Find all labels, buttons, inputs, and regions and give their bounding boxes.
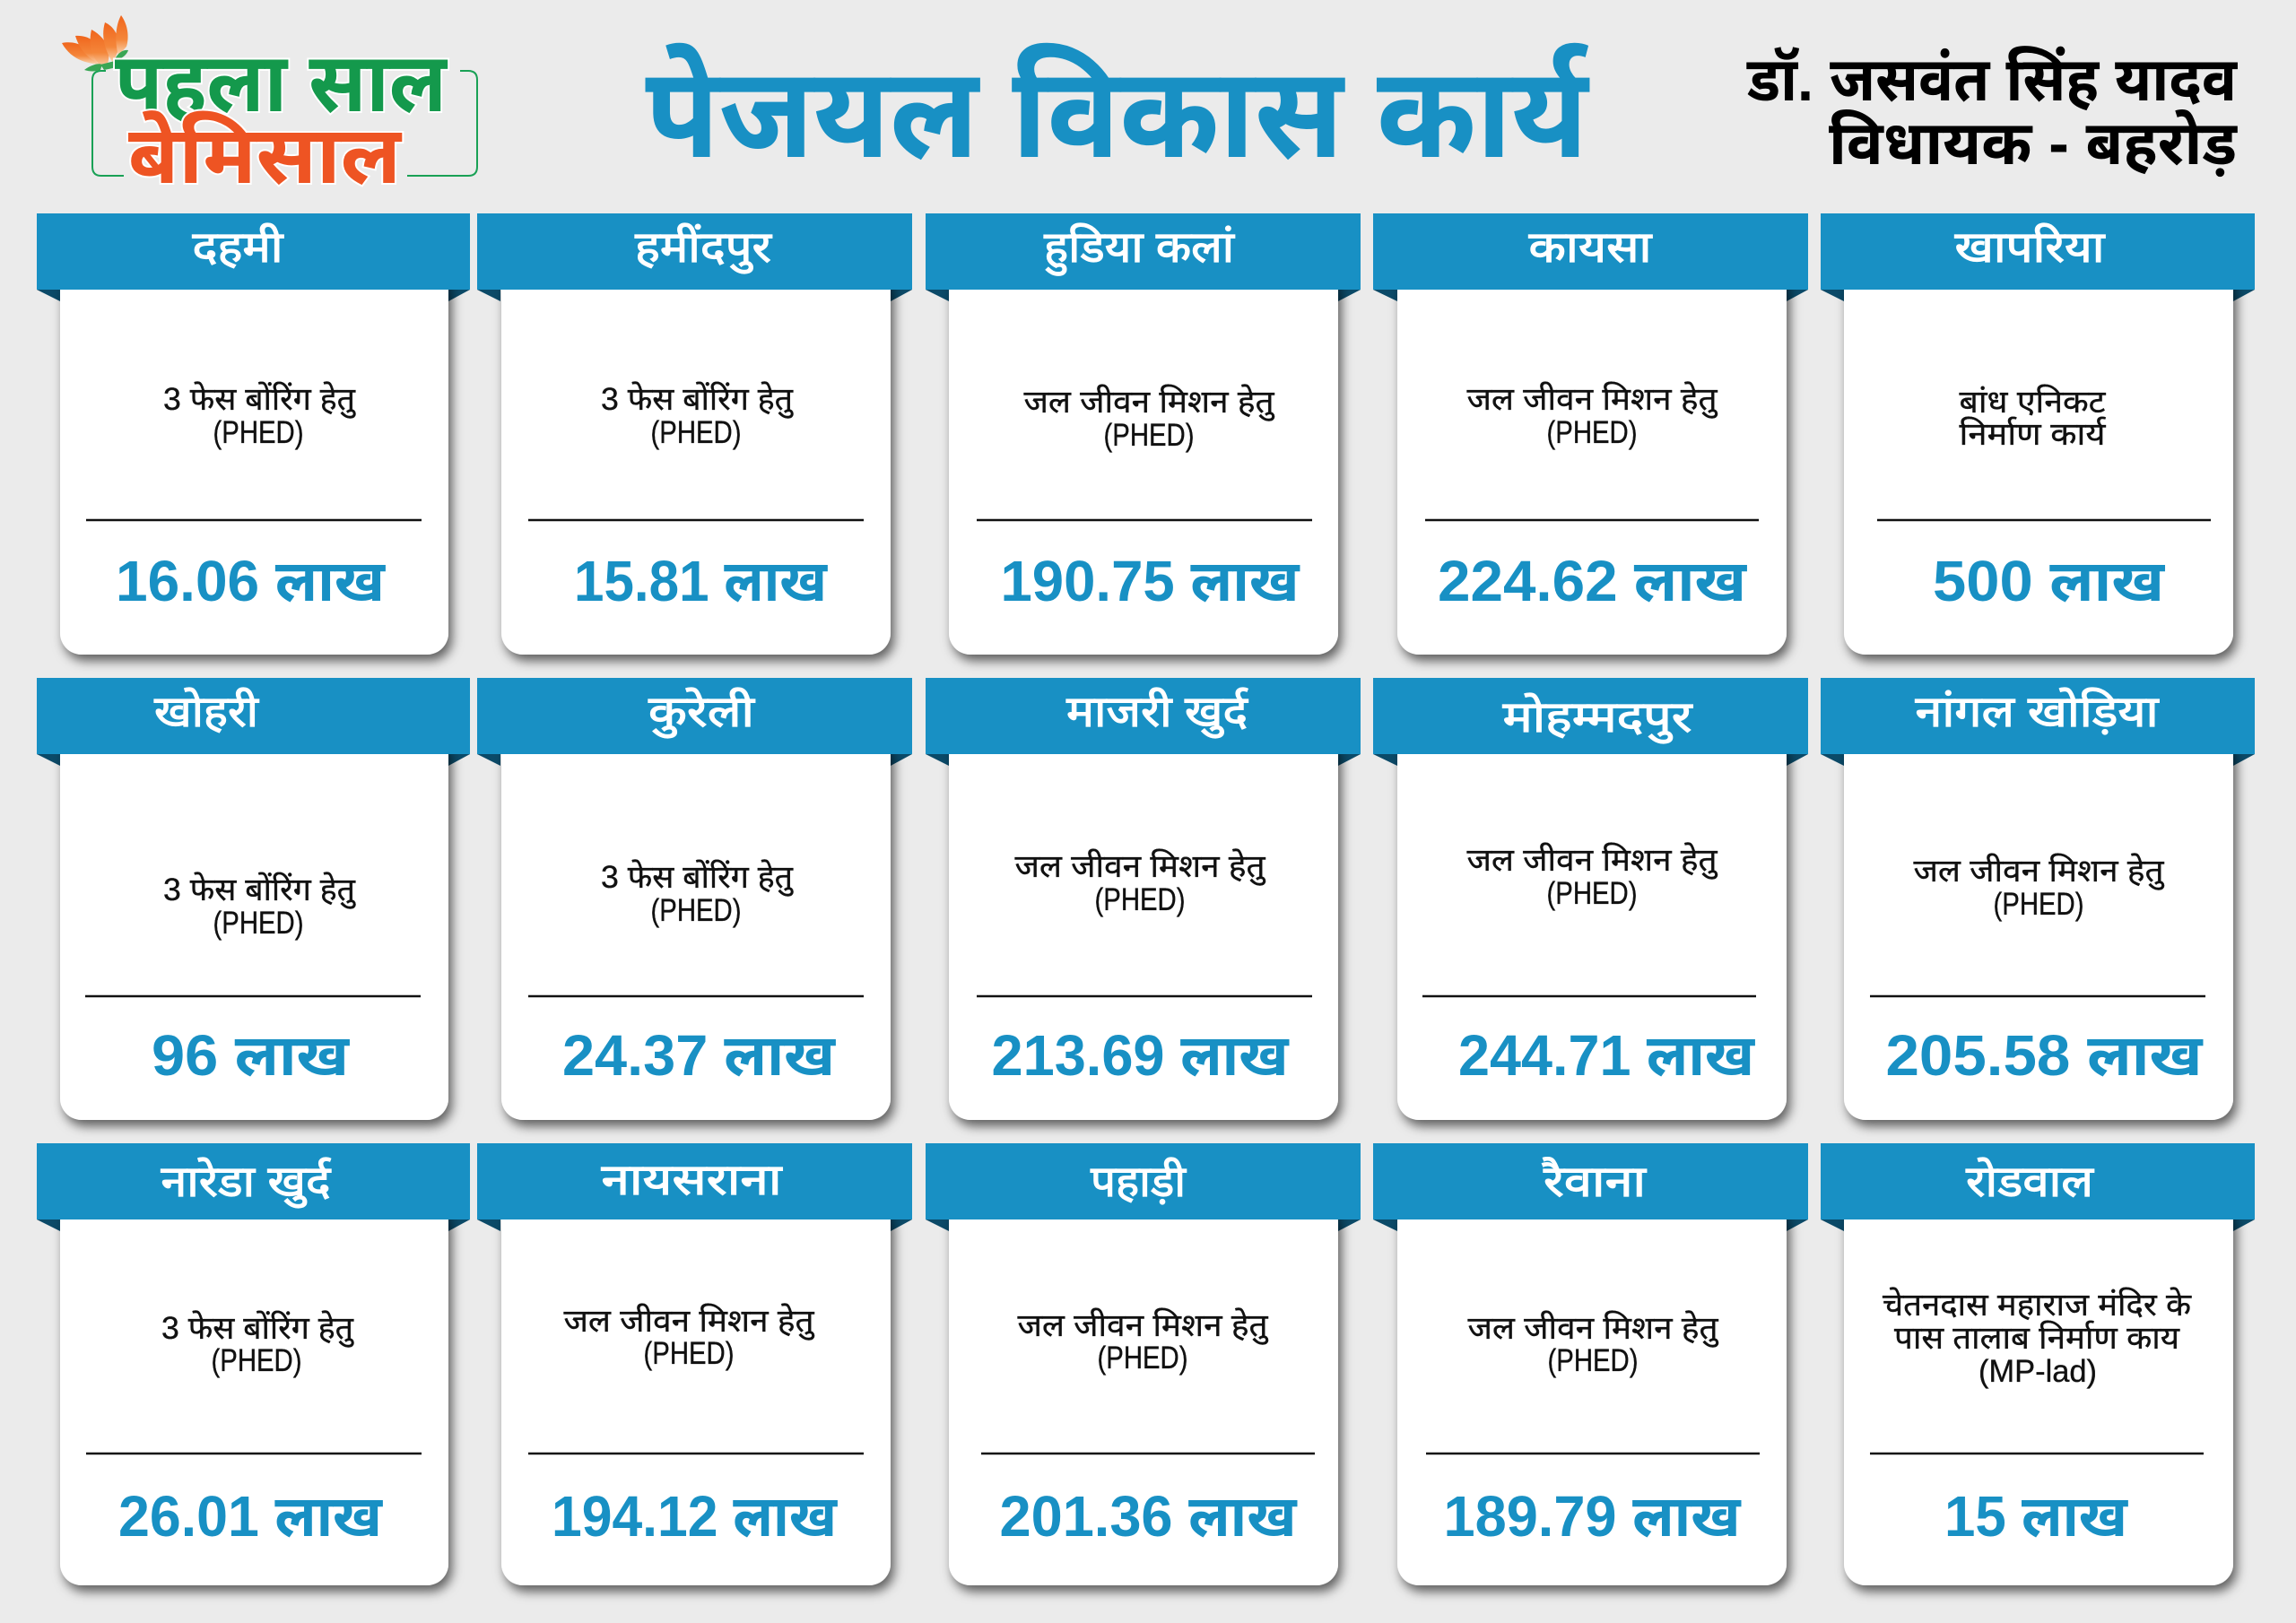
panel: pahadi: 201.36 लाख	[999, 1484, 1298, 1549]
panel: rodwal: चेतनदास महाराज मंदिर के	[1883, 1287, 2192, 1323]
panel: raivana: 189.79 लाख	[1444, 1484, 1742, 1549]
panel: hamindpur: हमींदपुर	[635, 222, 772, 274]
panel: khohari: 96 लाख	[152, 1023, 351, 1088]
panel: khohari: (PHED)	[213, 906, 303, 941]
panel: majari khurd: माजरी खुर्द	[1066, 687, 1248, 739]
panel: pahadi: जल जीवन मिशन हेतु	[1017, 1307, 1269, 1344]
panel: nangal khodiya: जल जीवन मिशन हेतु	[1914, 853, 2165, 890]
logo line 1: पहला साल	[115, 38, 448, 129]
title: पेजयल विकास कार्य	[646, 42, 1590, 185]
panel: hamindpur	[477, 213, 912, 655]
panel: kaysa: (PHED)	[1546, 415, 1638, 450]
panel: hudiya kalan: हुडिया कलां	[1044, 223, 1236, 276]
panel: kureli: कुरेली	[648, 687, 756, 739]
panel: kureli: (PHED)	[651, 893, 741, 928]
panel: pahadi: पहाड़ी	[1091, 1158, 1187, 1206]
panel: hudiya kalan	[926, 213, 1361, 655]
panel: khapariya: निर्माण कार्य	[1959, 416, 2107, 452]
panel: hamindpur: (PHED)	[651, 415, 741, 450]
panel: raivana: (PHED)	[1548, 1343, 1638, 1378]
panel: majari khurd: (PHED)	[1094, 882, 1186, 917]
panel: nangal khodiya: 205.58 लाख	[1885, 1023, 2205, 1088]
panel: khapariya: 500 लाख	[1933, 549, 2166, 613]
panel: khapariya: खापरिया	[1955, 223, 2106, 272]
icon: lotus	[62, 15, 128, 72]
panel: naysarana: नायसराना	[601, 1157, 783, 1204]
panel: dahmi: दहमी	[192, 223, 284, 272]
panel: naysarana: जल जीवन मिशन हेतु	[563, 1303, 815, 1340]
panel: pahadi: (PHED)	[1098, 1341, 1187, 1376]
panel: raivana	[1373, 1143, 1808, 1585]
panel: kaysa: 224.62 लाख	[1438, 549, 1748, 613]
panel: raivana: जल जीवन मिशन हेतु	[1467, 1310, 1719, 1347]
panel: dahmi	[37, 213, 470, 655]
panel: majari khurd: 213.69 लाख	[992, 1023, 1290, 1088]
panel: naysarana: 194.12 लाख	[552, 1484, 839, 1549]
panel: rodwal	[1821, 1143, 2255, 1585]
panel: majari khurd	[926, 678, 1361, 1120]
panel: khohari: खोहरी	[154, 688, 260, 736]
panel: mohammadpur: 244.71 लाख	[1458, 1023, 1756, 1088]
panel: nareda khurd: (PHED)	[212, 1343, 301, 1378]
panel: dahmi: 16.06 लाख	[116, 549, 387, 613]
panel: pahadi	[926, 1143, 1361, 1585]
panel: rodwal: पास तालाब निर्माण काय	[1894, 1320, 2180, 1356]
panel: hudiya kalan: जल जीवन मिशन हेतु	[1024, 384, 1275, 421]
panel: kureli	[477, 678, 912, 1120]
panel: nareda khurd: नारेडा खुर्द	[161, 1157, 331, 1209]
panel: khapariya: बांध एनिकट	[1959, 384, 2107, 420]
panel: rodwal: रोडवाल	[1966, 1158, 2095, 1206]
panel: naysarana	[477, 1143, 912, 1585]
panel: mohammadpur: मोहम्मदपुर	[1503, 693, 1693, 744]
panel: khohari	[37, 678, 470, 1120]
panel: rodwal: (MP-lad)	[1979, 1354, 2097, 1389]
panel: naysarana: (PHED)	[644, 1336, 734, 1371]
panel: mohammadpur: (PHED)	[1546, 876, 1638, 911]
panel: rodwal: 15 लाख	[1944, 1484, 2129, 1549]
panel: dahmi: (PHED)	[213, 415, 303, 450]
panel: dahmi: 3 फेस बोंरिंग हेतु	[163, 381, 356, 418]
panel: kureli: 24.37 लाख	[562, 1023, 837, 1088]
panel: kureli: 3 फेस बोंरिंग हेतु	[601, 859, 794, 896]
panel: mohammadpur: जल जीवन मिशन हेतु	[1467, 842, 1718, 879]
panel: kaysa: जल जीवन मिशन हेतु	[1467, 381, 1718, 418]
panel: khapariya	[1821, 213, 2255, 655]
panel: majari khurd: जल जीवन मिशन हेतु	[1015, 848, 1266, 885]
logo line 2: बेमिसाल	[128, 110, 403, 201]
panel: khohari: 3 फेस बोंरिंग हेतु	[163, 872, 356, 908]
panel: hamindpur: 3 फेस बोंरिंग हेतु	[601, 381, 794, 418]
logo: pehla saal bemisaal	[62, 15, 477, 201]
panel: kaysa	[1373, 213, 1808, 655]
panel: nangal khodiya: नांगल खोड़िया	[1916, 688, 2160, 736]
logo frame	[92, 71, 477, 176]
author name and designation	[1746, 46, 2239, 178]
author name and designation: विधायक - बहरोड़	[1829, 109, 2238, 178]
panel: nangal khodiya	[1821, 678, 2255, 1120]
panel: nareda khurd: 26.01 लाख	[118, 1484, 384, 1549]
panel: nareda khurd	[37, 1143, 470, 1585]
panel: mohammadpur	[1373, 678, 1808, 1120]
panel: hamindpur: 15.81 लाख	[574, 549, 829, 613]
panel: kaysa: कायसा	[1528, 224, 1653, 272]
panel: nangal khodiya: (PHED)	[1993, 887, 2084, 922]
panel: hudiya kalan: (PHED)	[1103, 418, 1195, 453]
author name and designation: डॉ. जसवंत सिंह यादव	[1746, 46, 2239, 114]
panel: hudiya kalan: 190.75 लाख	[1001, 549, 1300, 613]
panel: raivana: रैवाना	[1542, 1157, 1648, 1206]
panel: nareda khurd: 3 फेस बोंरिंग हेतु	[161, 1310, 354, 1347]
